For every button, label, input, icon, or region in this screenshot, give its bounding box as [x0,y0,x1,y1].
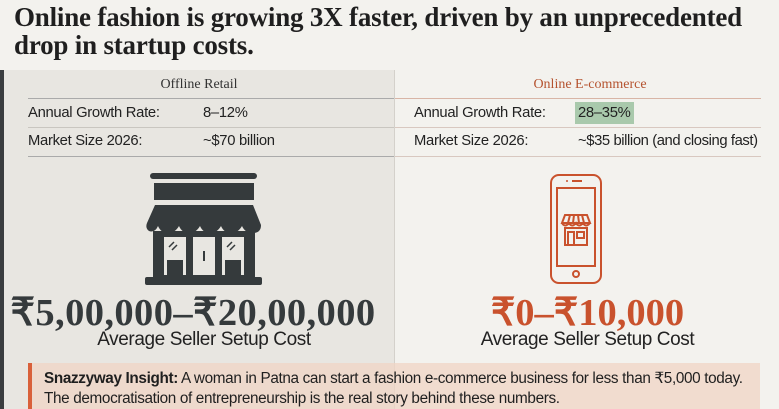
price: offline: ₹5,00,000–₹20,00,000 [10,292,376,334]
callout: snazzyway insight: The democratisation of entrepreneurship is the real story behind these numbers. [44,390,560,407]
panel: offline retail: 8–12% [203,105,248,121]
panel: online e-commerce [394,70,779,409]
title [14,2,742,60]
row: growth [414,102,634,124]
callout: snazzyway insight: Snazzyway Insight: A woman in Patna can start a fashion e-commerce business for less than ₹5,000 today. [44,370,743,387]
row: market size: ~$35 billion (and closing fast) [578,133,758,149]
caption: online: Average Seller Setup Cost [481,329,694,350]
callout: snazzyway insight [28,363,760,409]
row: market size: ~$70 billion [203,133,275,149]
column header: offline: Offline Retail [160,77,238,92]
row: market size: Market Size 2026: [28,133,142,149]
row: growth: Annual Growth Rate: [28,105,160,121]
title: drop in startup costs. [14,30,254,60]
panel: offline retail [4,70,394,409]
caption: offline: Average Seller Setup Cost [97,329,311,350]
row: market size: Market Size 2026: [414,133,528,149]
row: growth: 28–35% [578,105,631,121]
title: Online fashion is growing 3X faster, driven by an unprecedented [14,2,742,32]
row: market size [28,133,275,149]
row: growth [28,105,248,121]
icon: storefront [145,173,262,285]
column header: online: Online E-commerce [533,77,647,92]
row: market size [414,133,758,149]
row: growth: Annual Growth Rate: [414,105,546,121]
left dark edge strip [0,70,4,409]
icon: phone with shop [550,174,602,284]
price: online: ₹0–₹10,000 [491,292,684,334]
